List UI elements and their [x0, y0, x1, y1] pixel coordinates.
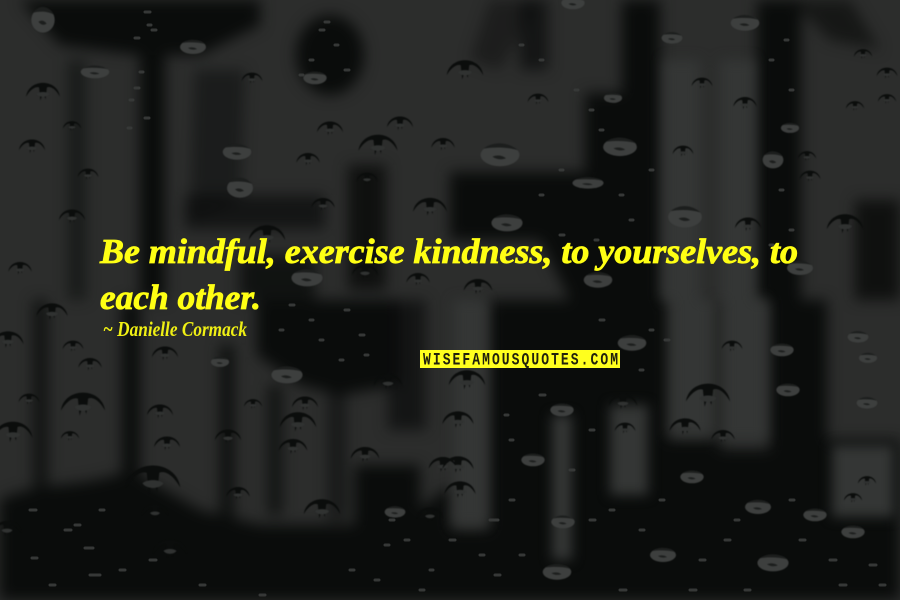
quote line 1: Be mindful, exercise kindness, to yourselves, to — [99, 232, 798, 271]
light trunks — [454, 60, 894, 560]
badge: wisefamousquotes: WISEFAMOUSQUOTES.COM — [423, 350, 618, 370]
attribution: ~ Danielle Cormack — [103, 317, 247, 341]
lower right — [450, 300, 900, 600]
lower left — [257, 300, 400, 395]
quote line 2: each other. — [100, 278, 261, 317]
quote text — [99, 232, 798, 317]
